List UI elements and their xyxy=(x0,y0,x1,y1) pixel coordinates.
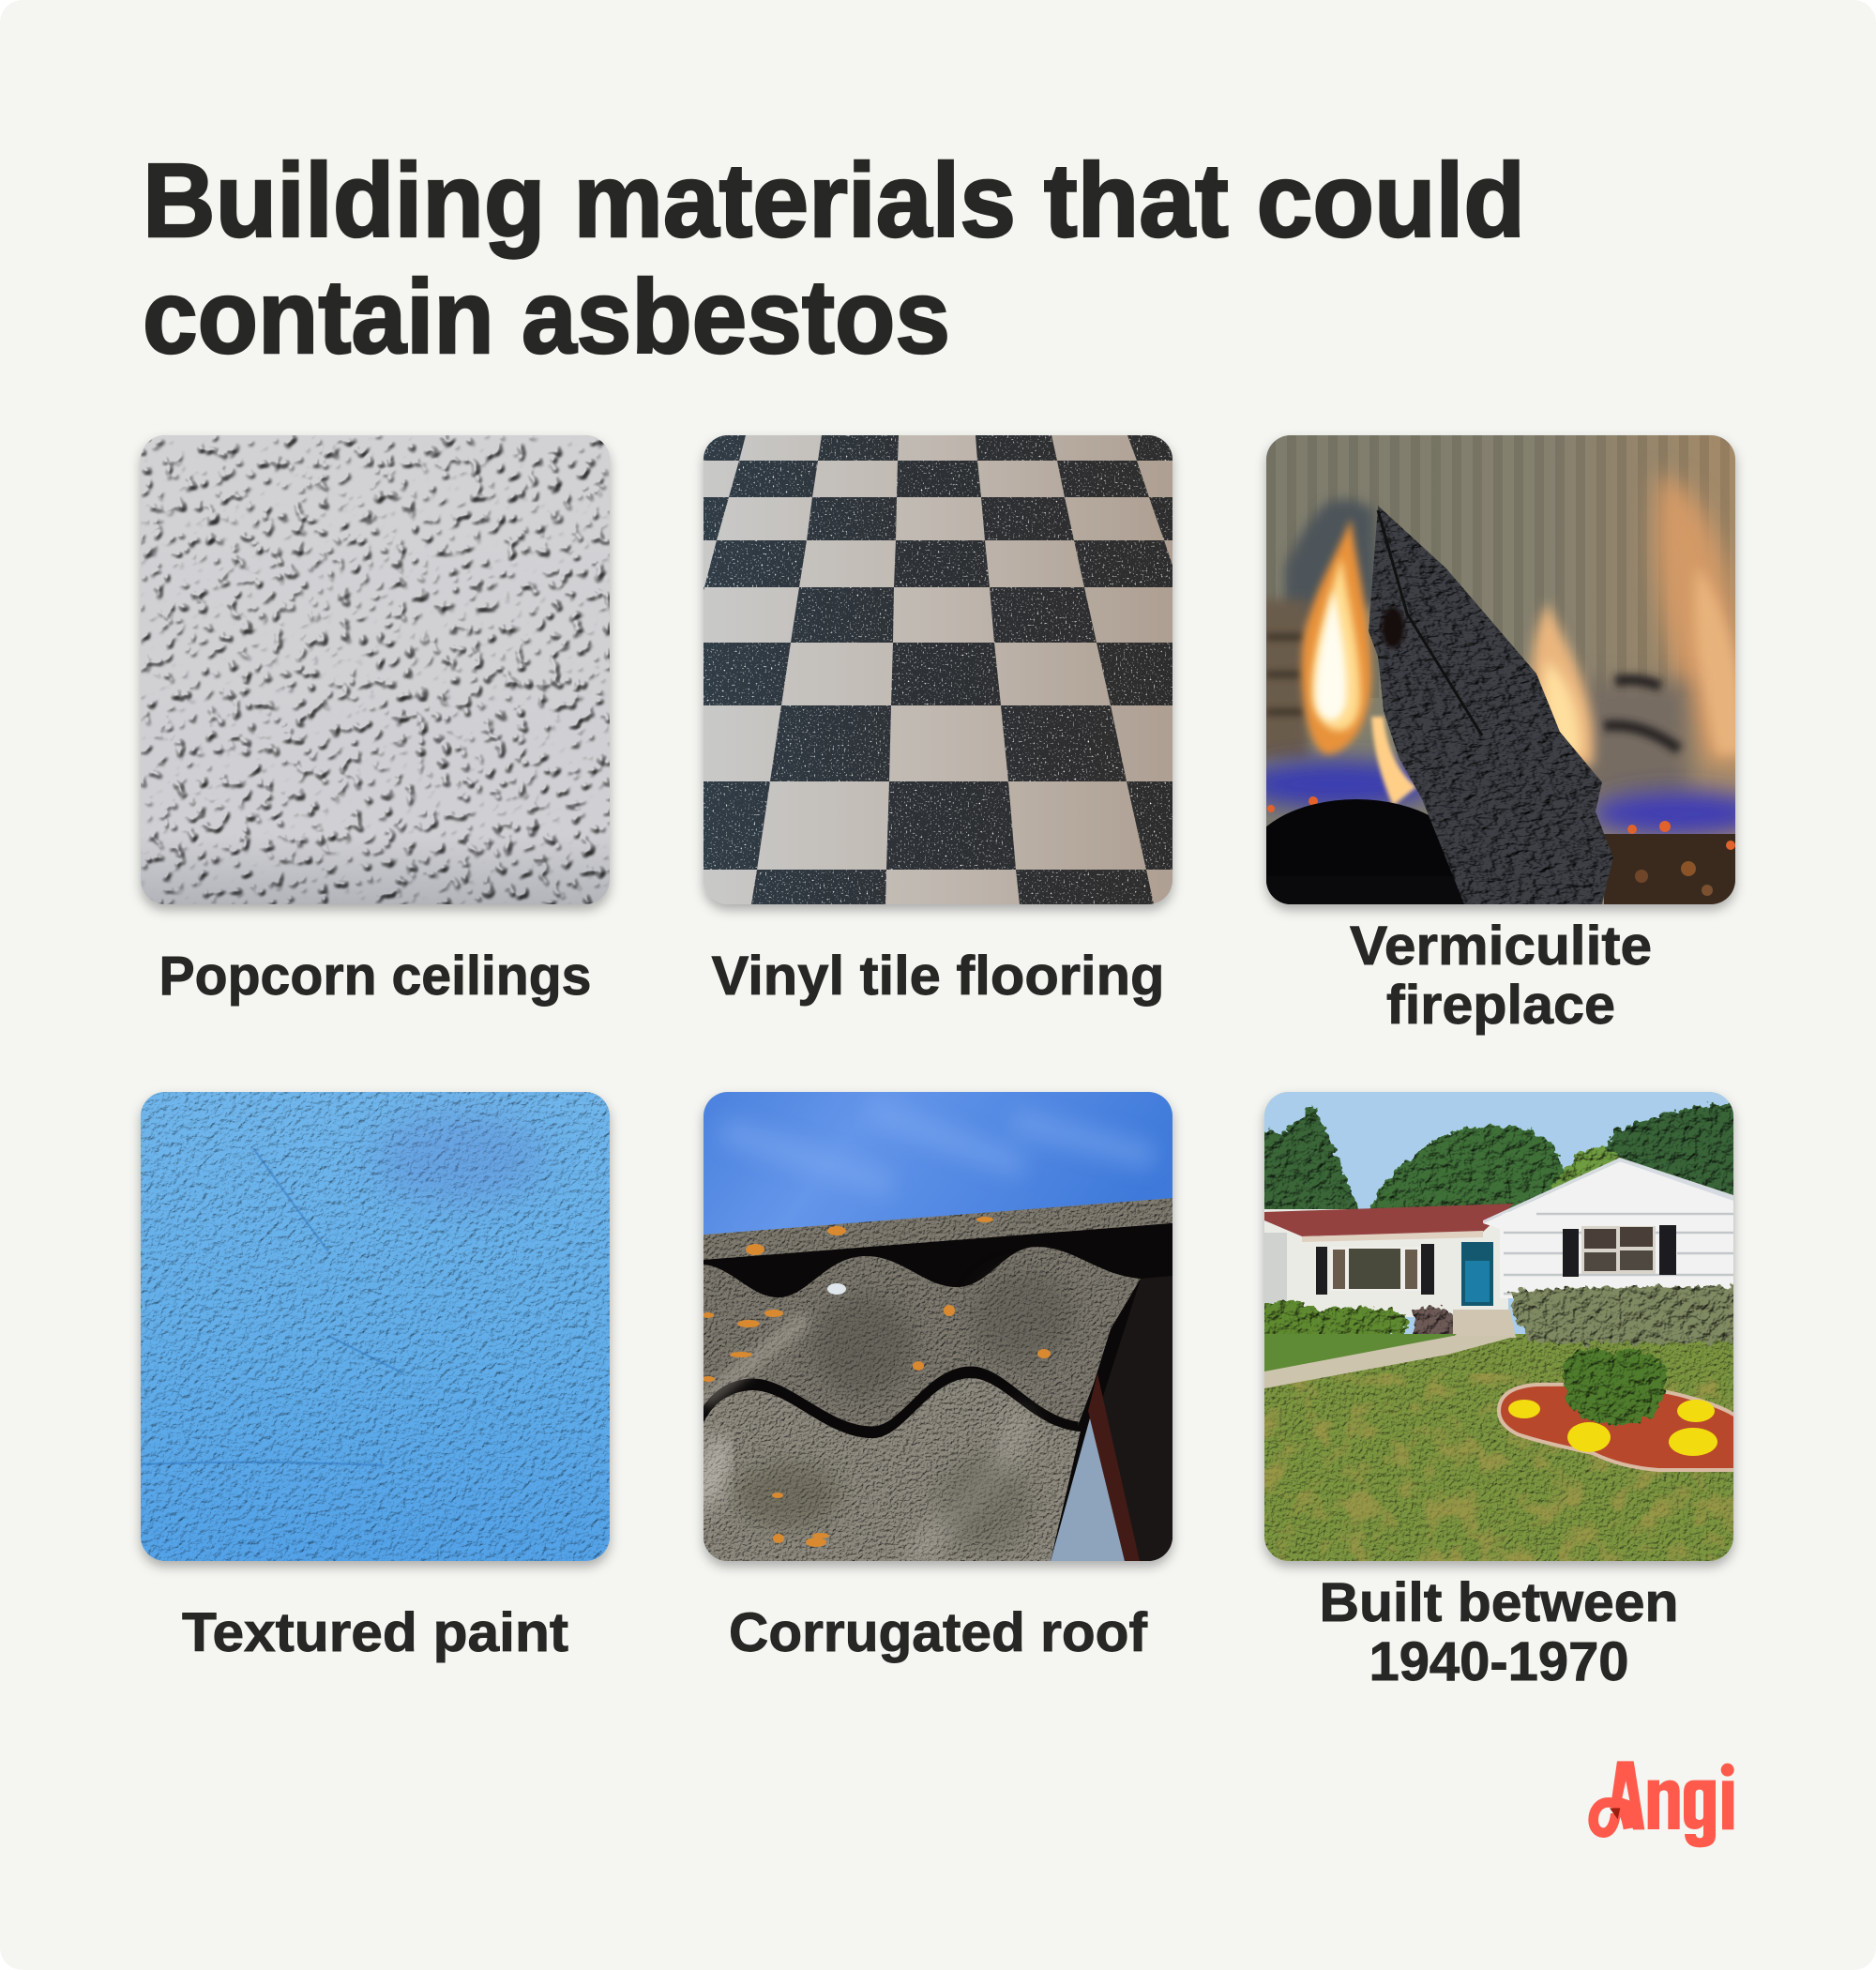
label: built between 1940-1970: 1940-1970 xyxy=(1369,1631,1628,1692)
title xyxy=(143,143,1525,375)
photo: house built between 1940 and 1970 xyxy=(1255,1092,1743,1561)
photo: vermiculite fireplace xyxy=(1260,434,1742,917)
title: contain asbestos xyxy=(143,259,950,375)
photo: vinyl tile floor xyxy=(697,434,1179,917)
photo: textured blue paint xyxy=(141,1092,610,1561)
left windows and door xyxy=(1316,1242,1493,1306)
label: vermiculite fireplace: fireplace xyxy=(1386,975,1615,1036)
label: corrugated roof: Corrugated roof xyxy=(729,1602,1148,1663)
label: built between 1940-1970: Built between xyxy=(1319,1572,1679,1633)
label: vermiculite fireplace: Vermiculite xyxy=(1350,916,1652,977)
title: Building materials that could xyxy=(143,143,1525,259)
label: popcorn ceilings: Popcorn ceilings xyxy=(159,946,591,1007)
label: vermiculite fireplace xyxy=(1350,916,1652,1036)
photo: popcorn ceiling xyxy=(141,435,610,904)
logo: Angi xyxy=(1594,1761,1734,1847)
label: built between 1940-1970 xyxy=(1319,1572,1679,1692)
label: vinyl tile flooring: Vinyl tile flooring xyxy=(711,946,1165,1007)
right windows xyxy=(1563,1225,1676,1277)
label: textured paint: Textured paint xyxy=(182,1602,568,1663)
photo: corrugated roof xyxy=(702,1092,1172,1561)
